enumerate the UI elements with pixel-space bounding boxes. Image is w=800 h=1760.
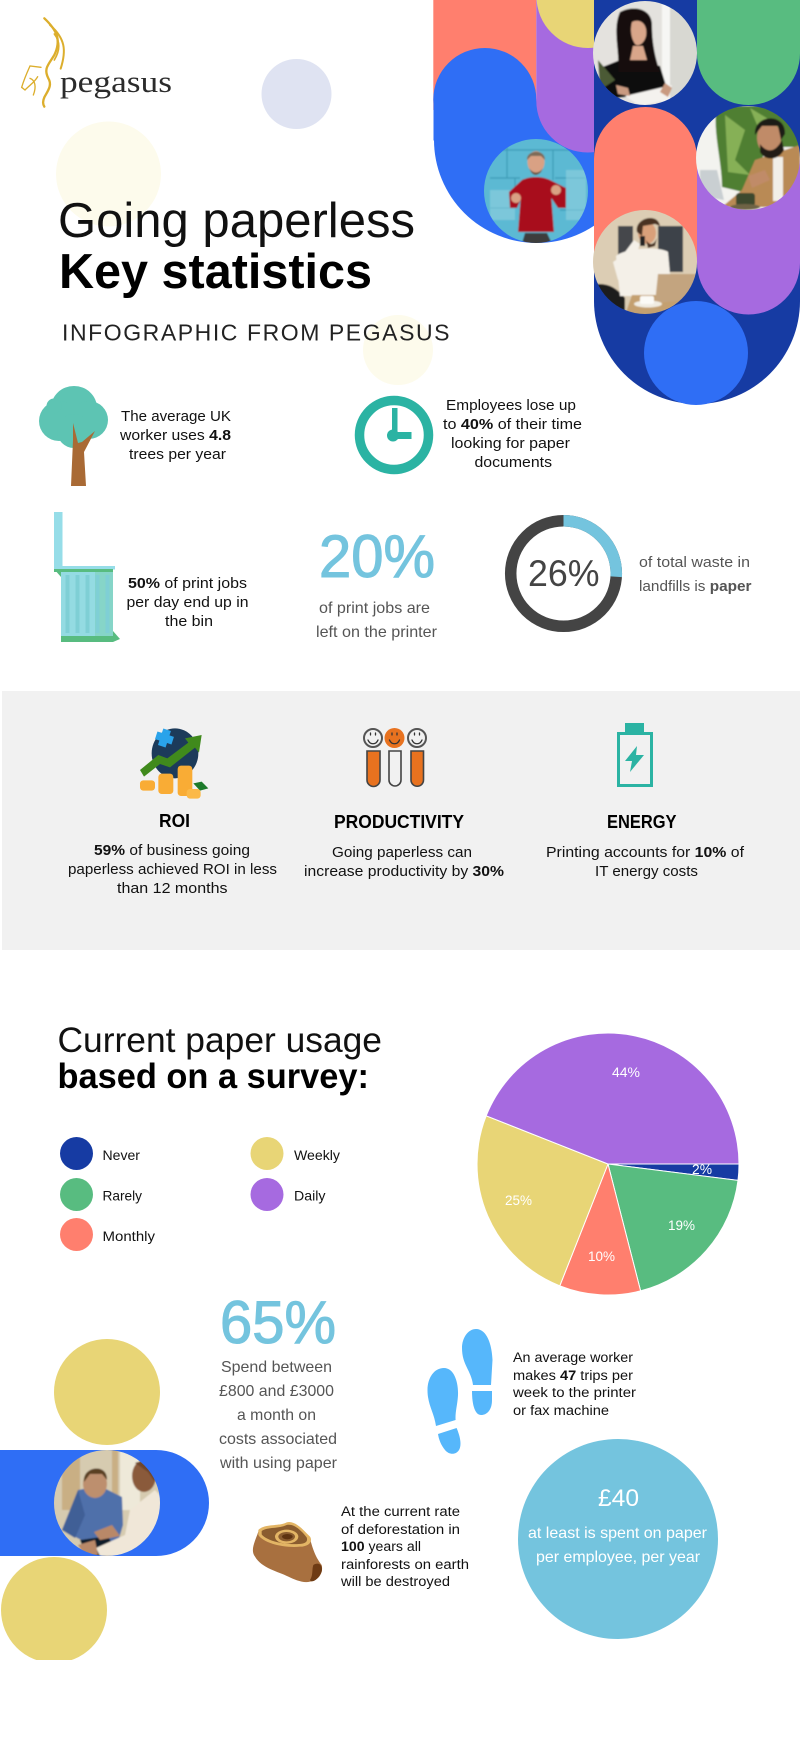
panel: grey benefits band <box>2 691 800 950</box>
text: energy: IT energy costs <box>595 863 698 880</box>
text: energy: Printing accounts for 10% of <box>546 844 745 861</box>
decorative circle: yellow upper <box>54 1339 160 1445</box>
stat caption: of print jobs are <box>319 600 430 617</box>
text: trees per year: trees per year <box>129 446 226 463</box>
decorative circle: lavender <box>262 59 332 129</box>
text: time looking for documents: looking for paper <box>451 435 570 452</box>
text: time looking for documents: documents <box>474 454 552 471</box>
header shapes: colourful pills with photos <box>433 0 800 405</box>
stat caption: £800 and £3000 <box>219 1383 334 1400</box>
callout: £40 per employee <box>518 1439 718 1639</box>
donut chart: 26%: 26% <box>528 553 600 594</box>
text: trips to the printer: or fax machine <box>513 1403 609 1418</box>
left cluster of pills <box>433 0 594 243</box>
callout: £40 per employee: per employee, per year <box>536 1549 701 1566</box>
icon: smiley test tubes <box>364 728 426 787</box>
stat number: 65% <box>220 1289 336 1356</box>
icon: footprints <box>428 1329 492 1454</box>
icon: ROI chart and coins <box>140 727 208 799</box>
text: trips to the printer: makes 47 trips per <box>513 1368 634 1383</box>
pie chart: 2% <box>692 1161 712 1177</box>
logo wordmark: pegasus <box>60 64 172 99</box>
heading: ROI: ROI <box>159 811 190 831</box>
stat: 65% spend <box>219 1289 338 1472</box>
text: trips to the printer: week to the printer <box>512 1385 637 1400</box>
callout: £40 per employee: at least is spent on paper <box>528 1525 708 1542</box>
text: ROI: 59% of business going <box>94 842 250 859</box>
text: productivity <box>304 844 504 880</box>
text: trees per year <box>119 408 231 463</box>
legend <box>60 1137 340 1251</box>
text: deforestation: 100 years all <box>341 1539 421 1554</box>
legend: Rarely <box>102 1188 142 1204</box>
legend: Monthly <box>102 1228 155 1244</box>
heading: energy: ENERGY <box>607 812 676 832</box>
photo: two men in discussion <box>54 1450 160 1556</box>
stat number: 20% <box>319 523 435 590</box>
text: print jobs in the bin <box>126 575 248 630</box>
text: deforestation: of deforestation in <box>341 1522 460 1537</box>
icon: gold winged horse <box>22 18 64 107</box>
icon: recycling bin <box>54 512 120 642</box>
stat caption <box>316 600 438 641</box>
blue pill <box>0 1450 209 1556</box>
text: trips to the printer <box>512 1350 637 1418</box>
text: productivity: increase productivity by 30% <box>304 863 504 880</box>
stat caption: left on the printer <box>316 624 438 641</box>
text: time looking for documents: to 40% of their time <box>443 416 582 433</box>
text: print jobs in the bin: per day end up in <box>126 594 248 611</box>
pie chart: 10% <box>588 1248 615 1264</box>
legend: Weekly <box>294 1147 340 1163</box>
photo: smiling man on phone with laptop <box>593 210 697 314</box>
text: deforestation: rainforests on earth <box>341 1557 469 1572</box>
stat: 20% left on printer <box>316 523 438 641</box>
title line 2: Key statistics <box>59 245 372 299</box>
heading: survey: Current paper usage <box>58 1021 382 1060</box>
right cluster of pills <box>594 0 800 405</box>
text: trees per year: worker uses 4.8 <box>119 427 231 444</box>
text: ROI <box>68 842 277 897</box>
text: print jobs in the bin: the bin <box>165 613 213 630</box>
heading: productivity: PRODUCTIVITY <box>334 812 464 832</box>
legend: Never <box>102 1147 140 1163</box>
text: ROI: than 12 months <box>117 880 228 897</box>
callout: £40 per employee: £40 <box>598 1485 639 1512</box>
text: ROI: paperless achieved ROI in less <box>68 861 277 878</box>
heading: survey: based on a survey: <box>58 1057 369 1096</box>
donut chart: 26% <box>511 521 616 626</box>
subtitle: INFOGRAPHIC FROM PEGASUS <box>62 320 450 346</box>
text: waste in landfills: landfills is paper <box>639 578 752 595</box>
photo: happy man in red sweater <box>484 139 588 243</box>
stat caption: a month on <box>237 1407 316 1424</box>
pie chart: 19% <box>668 1217 695 1233</box>
text: trips to the printer: An average worker <box>513 1350 634 1365</box>
photo: woman reading <box>593 1 697 105</box>
heading: survey <box>58 1021 382 1096</box>
text: trees per year: The average UK <box>121 408 231 425</box>
stat caption: costs associated <box>219 1431 337 1448</box>
legend: Daily <box>294 1188 326 1204</box>
text: deforestation: will be destroyed <box>340 1574 450 1589</box>
stat caption: Spend between <box>221 1359 332 1376</box>
text: energy <box>546 844 745 880</box>
stat caption: with using paper <box>219 1455 338 1472</box>
title <box>58 194 415 299</box>
pie chart: 44% <box>612 1064 640 1080</box>
decorative circle: cream small <box>363 315 433 385</box>
stat caption <box>219 1359 338 1472</box>
text: time looking for documents: Employees lose up <box>446 397 576 414</box>
title line 1: Going paperless <box>58 194 415 248</box>
icon: tree <box>39 386 108 486</box>
logo: pegasus <box>22 18 172 107</box>
pie chart: 25% <box>505 1192 532 1208</box>
text: productivity: Going paperless can <box>332 844 472 861</box>
icon: clock <box>360 400 428 470</box>
text: print jobs in the bin: 50% of print jobs <box>128 575 247 592</box>
text: deforestation: At the current rate <box>341 1504 460 1519</box>
text: waste in landfills <box>639 554 752 595</box>
decorative circle: yellow lower <box>1 1557 107 1663</box>
text: waste in landfills: of total waste in <box>639 554 750 571</box>
pie chart <box>477 1033 739 1295</box>
text: time looking for documents <box>443 397 582 471</box>
icon: battery <box>618 723 652 786</box>
text: deforestation <box>340 1504 469 1589</box>
icon: tree stump <box>253 1522 322 1582</box>
decorative circle: cream large <box>56 122 161 226</box>
photo: bearded man with phone and coffee <box>695 105 800 211</box>
